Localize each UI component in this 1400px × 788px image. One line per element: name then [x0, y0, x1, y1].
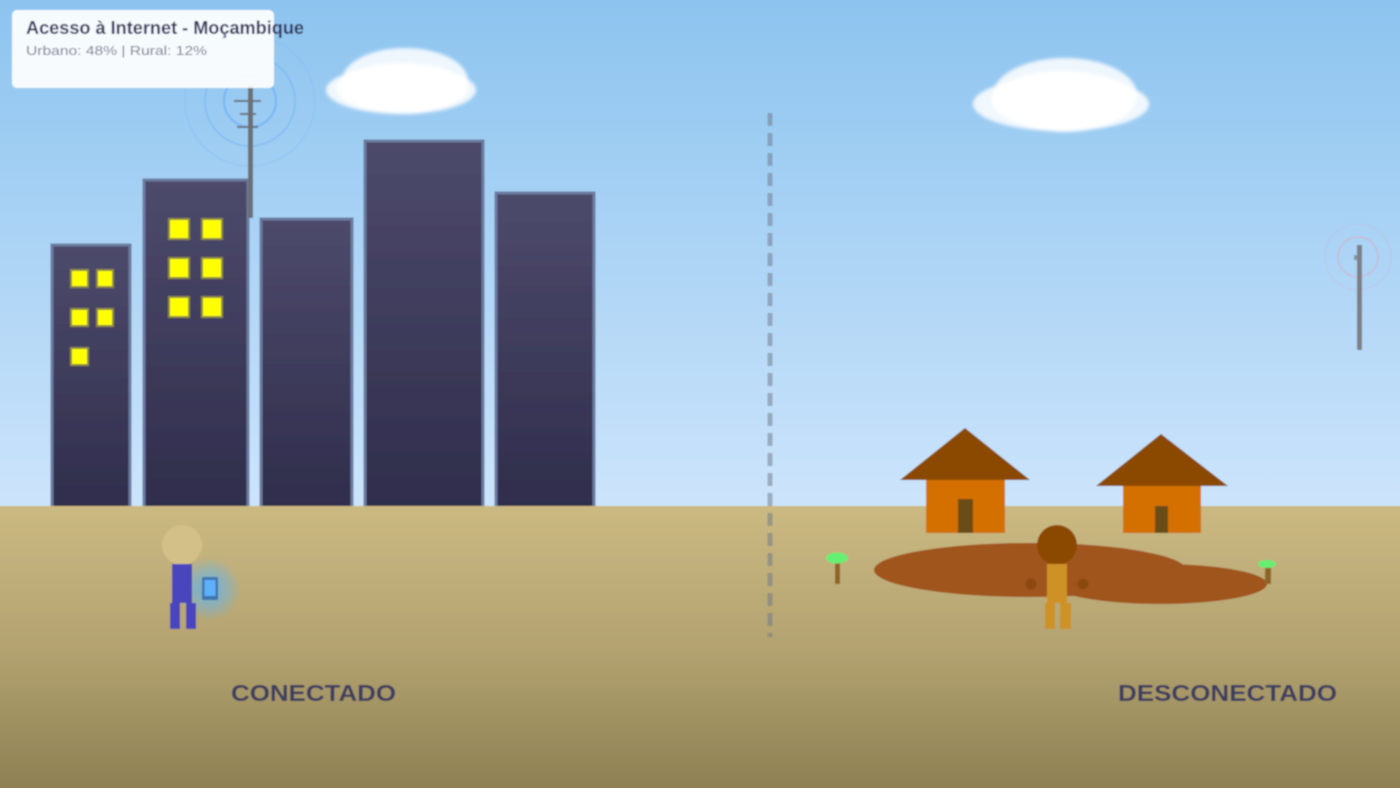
building 4 — [365, 141, 483, 515]
sky background — [0, 0, 1400, 506]
panel title: Acesso à Internet - Moçambique — [26, 18, 304, 38]
head — [162, 525, 202, 565]
icon: plant right — [1258, 560, 1276, 584]
label: disconnected: DESCONECTADO — [1118, 680, 1337, 706]
city buildings — [52, 141, 594, 515]
dirt patches — [874, 543, 1267, 604]
hut 2 — [1096, 434, 1228, 533]
body — [172, 564, 192, 603]
building 5 — [496, 193, 594, 515]
building 3 — [261, 219, 352, 515]
legs — [170, 603, 180, 629]
label: connected: CONECTADO — [231, 680, 396, 706]
building 1 — [52, 245, 130, 515]
ground — [0, 506, 1400, 788]
cloud: left — [326, 48, 476, 114]
lit windows — [71, 219, 222, 365]
divider — [768, 113, 772, 637]
info panel — [12, 10, 304, 88]
phone — [202, 577, 218, 600]
icon: connected person with phone — [162, 525, 241, 629]
hut 1 — [900, 428, 1030, 533]
panel statistics: Urbano: 48% | Rural: 12% — [26, 43, 208, 58]
phone glow — [177, 557, 241, 621]
icon: disconnected person — [1026, 525, 1088, 629]
building 2 — [144, 180, 248, 515]
icon: plant left — [826, 552, 848, 584]
icon: urban antenna with signal waves — [185, 36, 315, 218]
huts — [900, 428, 1228, 533]
cloud: right — [973, 58, 1149, 132]
icon: rural antenna with weak signal — [1325, 224, 1391, 350]
